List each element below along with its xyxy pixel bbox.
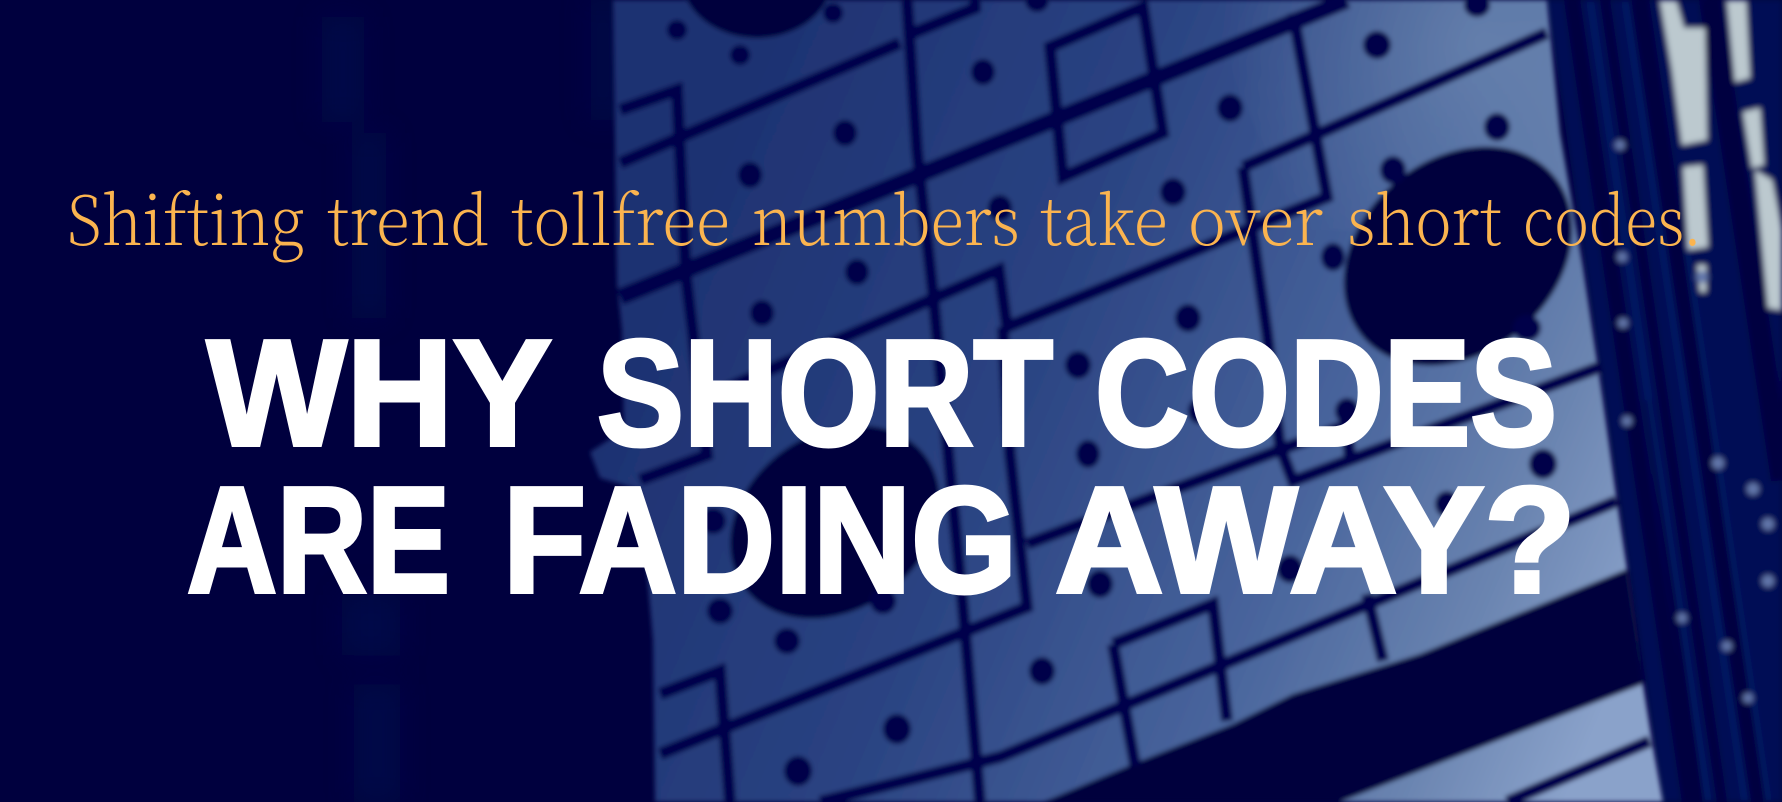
subtitle: Shifting [67, 168, 305, 265]
heading line 1: WHY [207, 308, 550, 477]
subtitle: take [1040, 168, 1168, 265]
subtitle: numbers [752, 168, 1020, 265]
main heading [187, 308, 1576, 624]
subtitle: trend [327, 168, 489, 265]
subtitle: codes. [1523, 168, 1702, 265]
subtitle: short [1347, 168, 1502, 265]
facade highlight [1200, 0, 1575, 230]
heading line 1: SHORT [597, 308, 1053, 477]
large dark circle, centre right [1300, 101, 1616, 411]
building facade panel with grid lines and holes [590, 0, 1663, 802]
heading line 2: FADING [503, 455, 1017, 624]
heading line 1: CODES [1095, 308, 1557, 477]
heading line 2: ARE [187, 455, 450, 624]
large dark circle, lower middle [693, 386, 977, 658]
background: faint shapes on the dark left side [322, 0, 616, 802]
subtitle: over [1188, 168, 1323, 265]
large dark circle, upper left [681, 0, 833, 38]
grid lines [620, 0, 1650, 802]
heading line 2: AWAY? [1055, 455, 1576, 624]
subtitle: tollfree [511, 168, 730, 265]
facade surface [590, 0, 1663, 802]
small round holes [667, 0, 1557, 786]
background: right-hand dark blue column [1547, 0, 1782, 802]
wide dark diagonal band [1043, 569, 1643, 802]
